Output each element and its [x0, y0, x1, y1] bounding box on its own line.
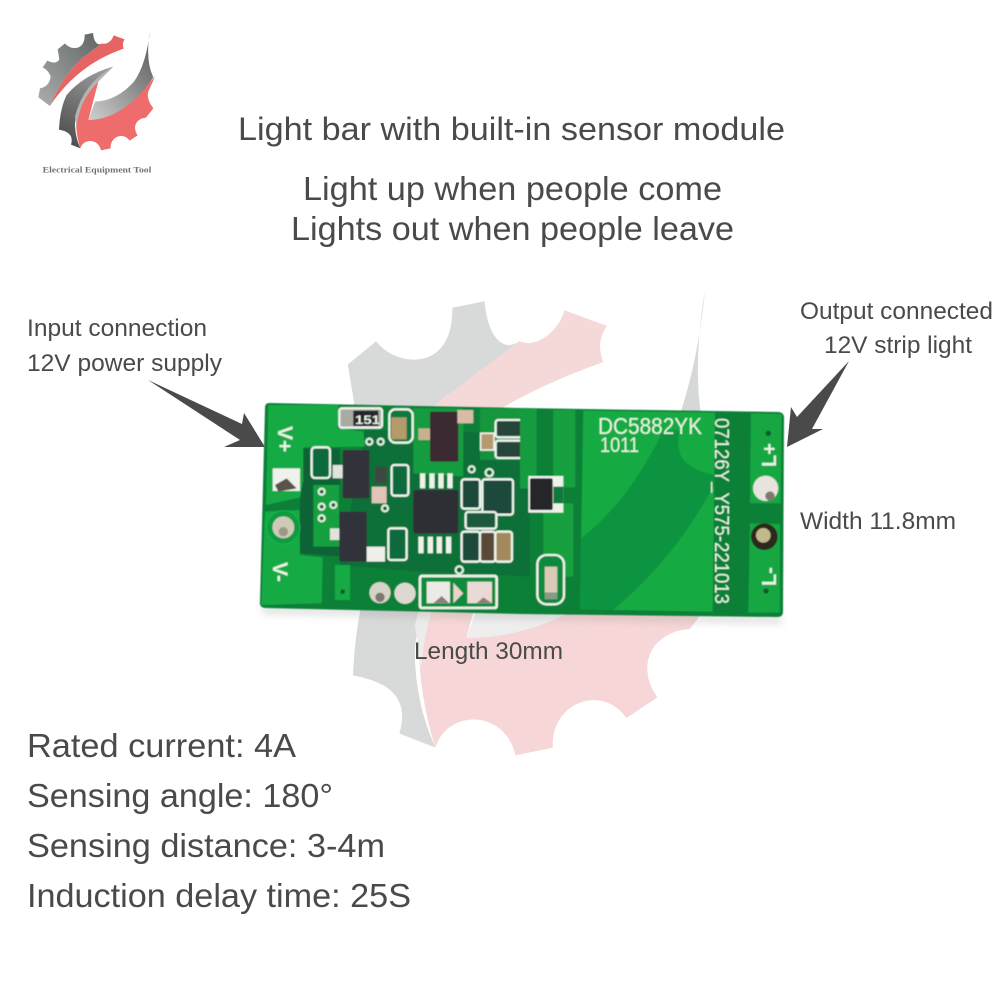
logo	[38, 30, 155, 175]
output label: 12V strip light	[824, 332, 972, 359]
top-left pad	[266, 405, 365, 505]
title: Light bar with built-in sensor module	[238, 111, 785, 147]
IC pins	[418, 473, 453, 553]
board base	[260, 403, 784, 617]
width label: Width 11.8mm	[800, 508, 956, 535]
circuit board	[260, 403, 784, 617]
logo caption: Electrical Equipment Tool	[43, 166, 152, 175]
silkscreen labels: 1011	[600, 434, 639, 457]
silkscreen labels: L-	[759, 567, 781, 586]
silkscreen labels: 07126Y_Y575-221013	[710, 418, 732, 604]
input label: 12V power supply	[27, 350, 222, 377]
bottom-left pad	[261, 510, 323, 605]
sensor IC	[528, 476, 563, 513]
silkscreen labels: V+	[273, 426, 296, 452]
specifications: Induction delay time: 25S	[27, 878, 411, 915]
output label	[800, 298, 993, 359]
big antenna pad	[580, 411, 715, 612]
watermark: gear logo	[273, 290, 724, 755]
vias	[319, 439, 493, 594]
silkscreen labels: L+	[759, 443, 781, 467]
board left half	[261, 405, 530, 608]
silkscreen labels: 151	[355, 413, 380, 427]
strip pads	[553, 410, 575, 487]
input solder pads	[267, 468, 416, 604]
dark substrate	[300, 448, 340, 557]
watermark shade on pad	[580, 430, 714, 610]
subtitle: Light up when people come	[303, 170, 722, 207]
middle pad	[313, 485, 339, 547]
silkscreen labels: DC5882YK	[598, 413, 703, 439]
board right half	[520, 409, 782, 613]
upper pads	[413, 408, 463, 477]
capacitors	[330, 410, 494, 562]
length label: Length 30mm	[414, 638, 563, 665]
specifications: Sensing angle: 180°	[27, 778, 333, 815]
solder joints	[751, 431, 778, 594]
board shadow	[262, 606, 782, 624]
silkscreen labels	[268, 413, 781, 604]
subtitle	[291, 170, 734, 247]
input label	[27, 315, 222, 377]
arrow: output	[787, 361, 849, 447]
arrow: input	[148, 380, 265, 447]
input label: Input connection	[27, 315, 207, 342]
specifications	[27, 728, 411, 915]
small pad	[335, 565, 350, 600]
subtitle: Lights out when people leave	[291, 210, 734, 247]
specifications: Rated current: 4A	[27, 728, 297, 765]
output label: Output connected	[800, 298, 993, 325]
right connector pads	[750, 413, 782, 503]
chips	[339, 412, 458, 562]
ceramic capacitor	[537, 555, 564, 604]
bottom connector	[420, 576, 497, 608]
small components	[312, 408, 525, 562]
silkscreen labels: V-	[268, 562, 291, 582]
specifications: Sensing distance: 3-4m	[27, 828, 385, 865]
